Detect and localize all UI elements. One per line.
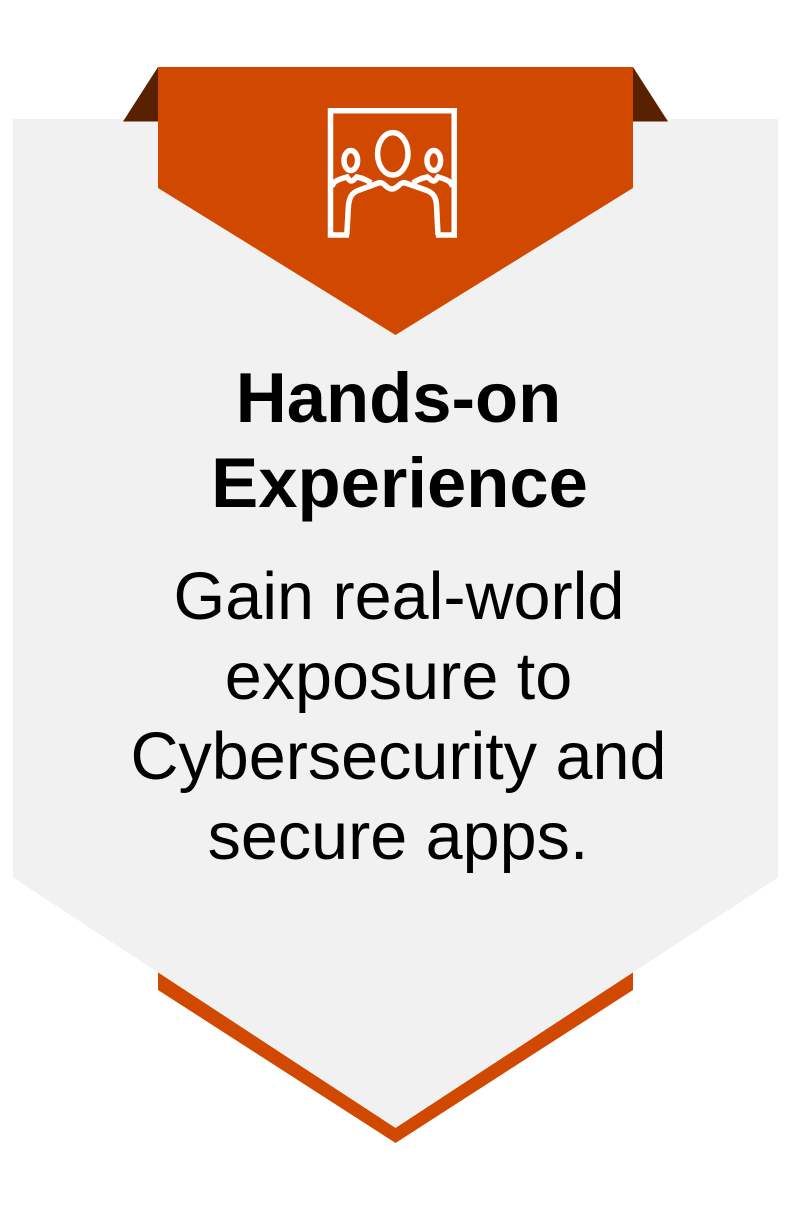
orange chevron behind panel bbox=[158, 960, 633, 1143]
heading line 2: Experience bbox=[211, 443, 588, 522]
left shoulders bbox=[332, 177, 371, 187]
right head bbox=[427, 150, 441, 170]
left head bbox=[344, 150, 358, 170]
body text line 4: secure apps. bbox=[208, 800, 588, 874]
body text line 1: Gain real-world bbox=[174, 560, 624, 634]
centre head bbox=[378, 133, 408, 175]
body text line 3: Cybersecurity and bbox=[131, 720, 666, 794]
body text line 2: exposure to bbox=[225, 640, 572, 714]
orange ribbon banner bbox=[158, 67, 633, 335]
left ribbon fold bbox=[123, 67, 158, 122]
icon: group of people in a frame bbox=[330, 111, 454, 235]
icon frame bbox=[330, 111, 454, 235]
right ribbon fold bbox=[633, 67, 668, 122]
centre body bbox=[347, 183, 438, 235]
right shoulders bbox=[413, 177, 452, 187]
heading line 1: Hands-on bbox=[236, 358, 561, 437]
